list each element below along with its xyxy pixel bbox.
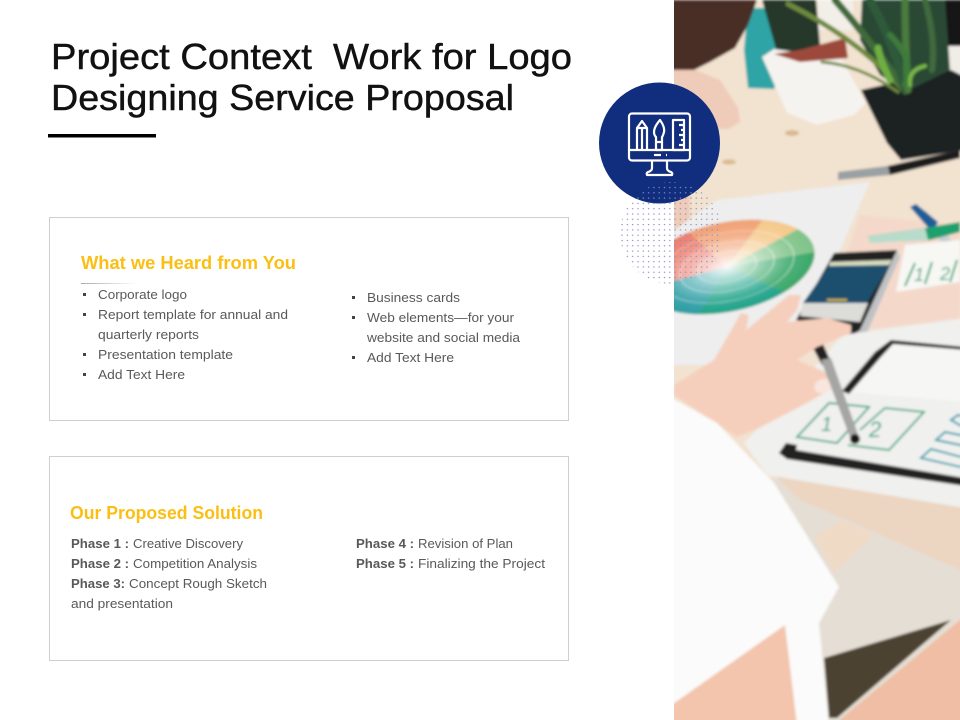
white shirt: [670, 397, 839, 720]
left phase list: Creative Discovery: [133, 537, 244, 551]
hand: [674, 295, 851, 437]
white planter: [762, 49, 866, 125]
title: [51, 36, 572, 118]
left bullet list: Presentation template: [98, 348, 233, 362]
floor: [770, 478, 960, 720]
background photo: designer at desk: 2: [868, 417, 881, 442]
background photo: designer at desk: 1: [821, 414, 832, 436]
left phase list: Concept Rough Sketch: [129, 577, 267, 591]
arm: [674, 626, 797, 720]
right phase list: Revision of Plan: [418, 537, 513, 551]
right phase list: Phase 4 :: [356, 537, 414, 551]
lower paper with tablet: [744, 318, 960, 508]
left phase list: Competition Analysis: [133, 557, 257, 571]
heading: our proposed solution: Our Proposed Solution: [70, 502, 263, 523]
planter soil: [774, 38, 848, 62]
table leg: [814, 520, 874, 573]
left phase list: Phase 3:: [71, 577, 125, 591]
leg: [837, 620, 960, 720]
top gap white: [818, 0, 853, 30]
pink sheet: [850, 218, 958, 327]
desk surface: [670, 0, 960, 510]
sketch card: [896, 240, 960, 292]
person hair: [670, 0, 757, 74]
green marker: [923, 220, 960, 242]
background photo: designer at desk: [674, 0, 960, 720]
right phase list: [356, 537, 546, 571]
icon badge circle: [599, 82, 720, 204]
green sketch boxes: [797, 403, 924, 450]
panel: our proposed solution: [50, 456, 568, 660]
background photo: designer at desk: 2: [939, 264, 950, 284]
left plant: [762, 0, 820, 56]
phone: [796, 250, 899, 335]
panel: what we heard from you: [50, 218, 568, 420]
person neck: [674, 68, 740, 230]
black marker: [836, 165, 892, 182]
colour wheel: [674, 218, 816, 316]
left phase list: and presentation: [71, 597, 173, 611]
green plant: [860, 0, 950, 92]
title: Project Context Work for Logo: [51, 36, 572, 77]
left phase list: Phase 1 :: [71, 537, 129, 551]
background photo: designer at desk: 1: [914, 265, 924, 285]
tablet frame: [779, 443, 960, 486]
right bullet list: Business cards: [367, 291, 460, 305]
title: Designing Service Proposal: [51, 77, 514, 118]
right bullet list: Add Text Here: [367, 351, 454, 365]
teal sketch boxes: [921, 415, 960, 468]
left bullet list: [83, 288, 288, 382]
right phase list: Phase 5 :: [356, 557, 414, 571]
fingernail: [814, 378, 832, 394]
right bullet list: website and social media: [366, 331, 520, 345]
heading: what we heard: What we Heard from You: [81, 252, 296, 273]
table edge: [778, 478, 960, 570]
left phase list: Phase 2 :: [71, 557, 129, 571]
left bullet list: Corporate logo: [98, 288, 187, 302]
left phase list: [71, 537, 267, 611]
dot pattern circle: [620, 182, 722, 284]
left bullet list: quarterly reports: [98, 328, 199, 342]
title rule: [48, 134, 156, 138]
right bullet list: [352, 291, 520, 365]
right phase list: Finalizing the Project: [418, 557, 546, 571]
blue pen: [924, 211, 952, 242]
teal ruler: [742, 6, 778, 90]
left bullet list: Report template for annual and: [98, 308, 288, 322]
wood knots: [785, 130, 799, 136]
shorts: [824, 620, 951, 718]
pencil: [821, 358, 859, 440]
paper with colour wheel: [670, 182, 870, 365]
pen in hand upper: [812, 342, 831, 365]
icon: monitor with design tools: [629, 114, 690, 175]
heading underline: [81, 283, 137, 284]
black planter: [861, 70, 960, 160]
left bullet list: Add Text Here: [98, 368, 185, 382]
right black corner: [942, 0, 960, 48]
right bullet list: Web elements—for your: [367, 311, 514, 325]
